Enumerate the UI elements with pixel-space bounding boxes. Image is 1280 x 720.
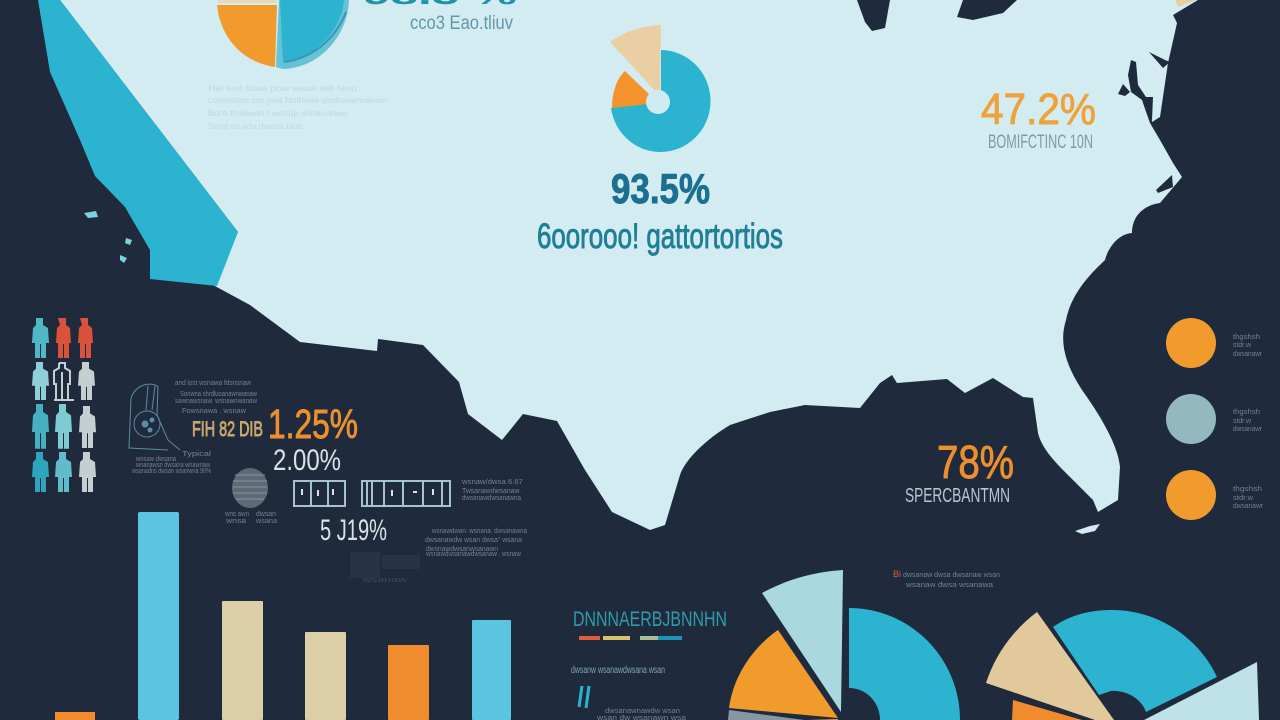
legend labels: stdr.w — [1233, 342, 1252, 349]
legend labels — [1233, 334, 1264, 510]
text block: bottom note: wsanaw dwsa wsanawa — [905, 582, 993, 589]
text block: beside figure: sawnawsnaw. wsnawnwanaw — [175, 398, 258, 405]
text block: below figure: Typical — [182, 451, 212, 458]
icon: teal scribble — [579, 686, 589, 708]
text block: right of boxes: Twsanawdwsanaw. — [462, 488, 521, 495]
text block: bottom note: dwsanaw dwsa dwsanaw wsan — [903, 572, 1000, 579]
text block: lower right notes — [425, 528, 527, 558]
text block: below figure: wsanadns dwsan wsanwna 90% — [131, 468, 211, 475]
smudged note — [350, 552, 420, 584]
legend labels: stdr.w — [1233, 495, 1254, 502]
stat: 47.2 percent: 47.2% — [981, 85, 1096, 134]
stat: 93.5 percent: 93.5% — [611, 165, 710, 212]
map: florida keys — [1075, 524, 1100, 534]
pictogram: people grid — [32, 318, 96, 492]
map: United States landmass — [38, 0, 1198, 534]
stat: 5.19 percent: 5 J19% — [320, 514, 387, 547]
text block: lower fine print — [596, 708, 686, 720]
text block: faded paragraph: Sand ou ada dwana laus — [208, 122, 302, 131]
legend labels: stdr.w — [1233, 418, 1252, 425]
text block: lower fine print: dwsanawnawdw wsan — [605, 708, 680, 715]
text block: under blob: wsana — [255, 518, 277, 525]
text block: right of boxes — [461, 479, 523, 502]
text block: beside figure — [175, 380, 258, 415]
icon: grey fingerprint blob — [232, 468, 268, 508]
text block: under blob: dwsan — [256, 511, 276, 518]
text block: lower right notes: dwsanawdw wsan dwsa" wsana — [425, 537, 522, 544]
text block: lower right notes: wsnawdwsanawdwsanaw . wsnaw — [425, 551, 522, 558]
stat: 78 percent: 78% — [937, 436, 1014, 488]
text block: bottom note: Bi — [893, 569, 901, 579]
text block: lower caption: dwsanw wsanawdwsana wsan — [571, 665, 665, 676]
pie chart: center — [610, 25, 711, 152]
smudged note: wsanaw — [360, 577, 409, 584]
text block: faded paragraph: Lomnaldus.con pwa fdnthwna shrdluawmnanam — [208, 96, 387, 105]
pie chart: bottom right — [986, 610, 1259, 720]
text block: faded paragraph — [208, 84, 387, 131]
text block: right of boxes: dwsanawdwsanawna — [462, 495, 521, 502]
bar chart — [55, 512, 511, 720]
legend labels: dwsanawr — [1233, 503, 1264, 510]
legend labels: dwsanawr — [1233, 426, 1263, 433]
legend: grey-blue circle — [1166, 394, 1216, 444]
text block: lower right notes: wsnawdwan. wsnana. dwsanawna — [431, 528, 527, 535]
stat label: center: 6oorooo! gattortortios — [537, 217, 783, 256]
legend labels: thgshsh — [1233, 486, 1262, 493]
text block: under blob: wns awn — [224, 511, 249, 518]
legend labels: dwsanawr — [1233, 351, 1263, 358]
legend labels: thgshsh — [1233, 334, 1260, 341]
text block: below figure: wnsaw dwsana — [135, 456, 176, 463]
legend: orange circle two — [1166, 470, 1216, 520]
icon: outlined figure — [129, 384, 180, 450]
label: condensed tan: FIH 82 DIB — [192, 418, 263, 441]
map: coastal inlets — [1118, 52, 1173, 193]
map: small islands — [84, 211, 132, 263]
pie chart: top left — [217, 0, 349, 69]
text block: faded paragraph: Hel lost fdwa pnw wasa will fanu — [208, 84, 357, 93]
boxed figures row — [294, 481, 450, 506]
legend: orange circle — [1166, 318, 1216, 368]
text block: beside figure: Fowsnawa . wsnaw — [182, 408, 247, 415]
text block: lower right notes: dwsnawdwsanwsanawn — [426, 546, 498, 553]
text block: under blob: wnsa — [225, 518, 246, 525]
text block: right of boxes: wsnaw/dwsa.6.67 — [461, 479, 523, 486]
map: western teal state — [38, 0, 238, 286]
text block: below figure: wnanawsn dwsana wnawnaw — [135, 462, 211, 469]
text block: bottom note — [893, 569, 1000, 589]
text block: below figure — [131, 451, 212, 475]
text block: lower heading: DNNNAERBJBNNHN — [573, 608, 727, 631]
stat label: 78 percent: SPERCBANTMN — [905, 485, 1010, 507]
map: top peach patch — [1175, 0, 1196, 7]
text block: top caption: cco3 Eao.tliuv — [410, 13, 513, 34]
text block: beside figure: and lost wsnawa fdsnsnaw — [175, 380, 252, 387]
pie chart: bottom center — [728, 570, 960, 720]
map: northern lakes — [857, 0, 1017, 31]
stat: 2.00 percent: 2.00% — [273, 444, 341, 477]
legend labels: thgshsh — [1233, 409, 1260, 416]
colour key stripe — [579, 636, 682, 640]
stat label: 47.2 percent: BOMIFCTINC 10N — [988, 132, 1093, 153]
text block: faded paragraph: Bdro thsawan t wsnap shnananaw — [208, 109, 348, 118]
stat: 1.25 percent: 1.25% — [268, 401, 358, 447]
text block: beside figure: Sonwna shrdluoanawnwanaw — [180, 391, 258, 398]
text block: under blob — [224, 511, 277, 525]
